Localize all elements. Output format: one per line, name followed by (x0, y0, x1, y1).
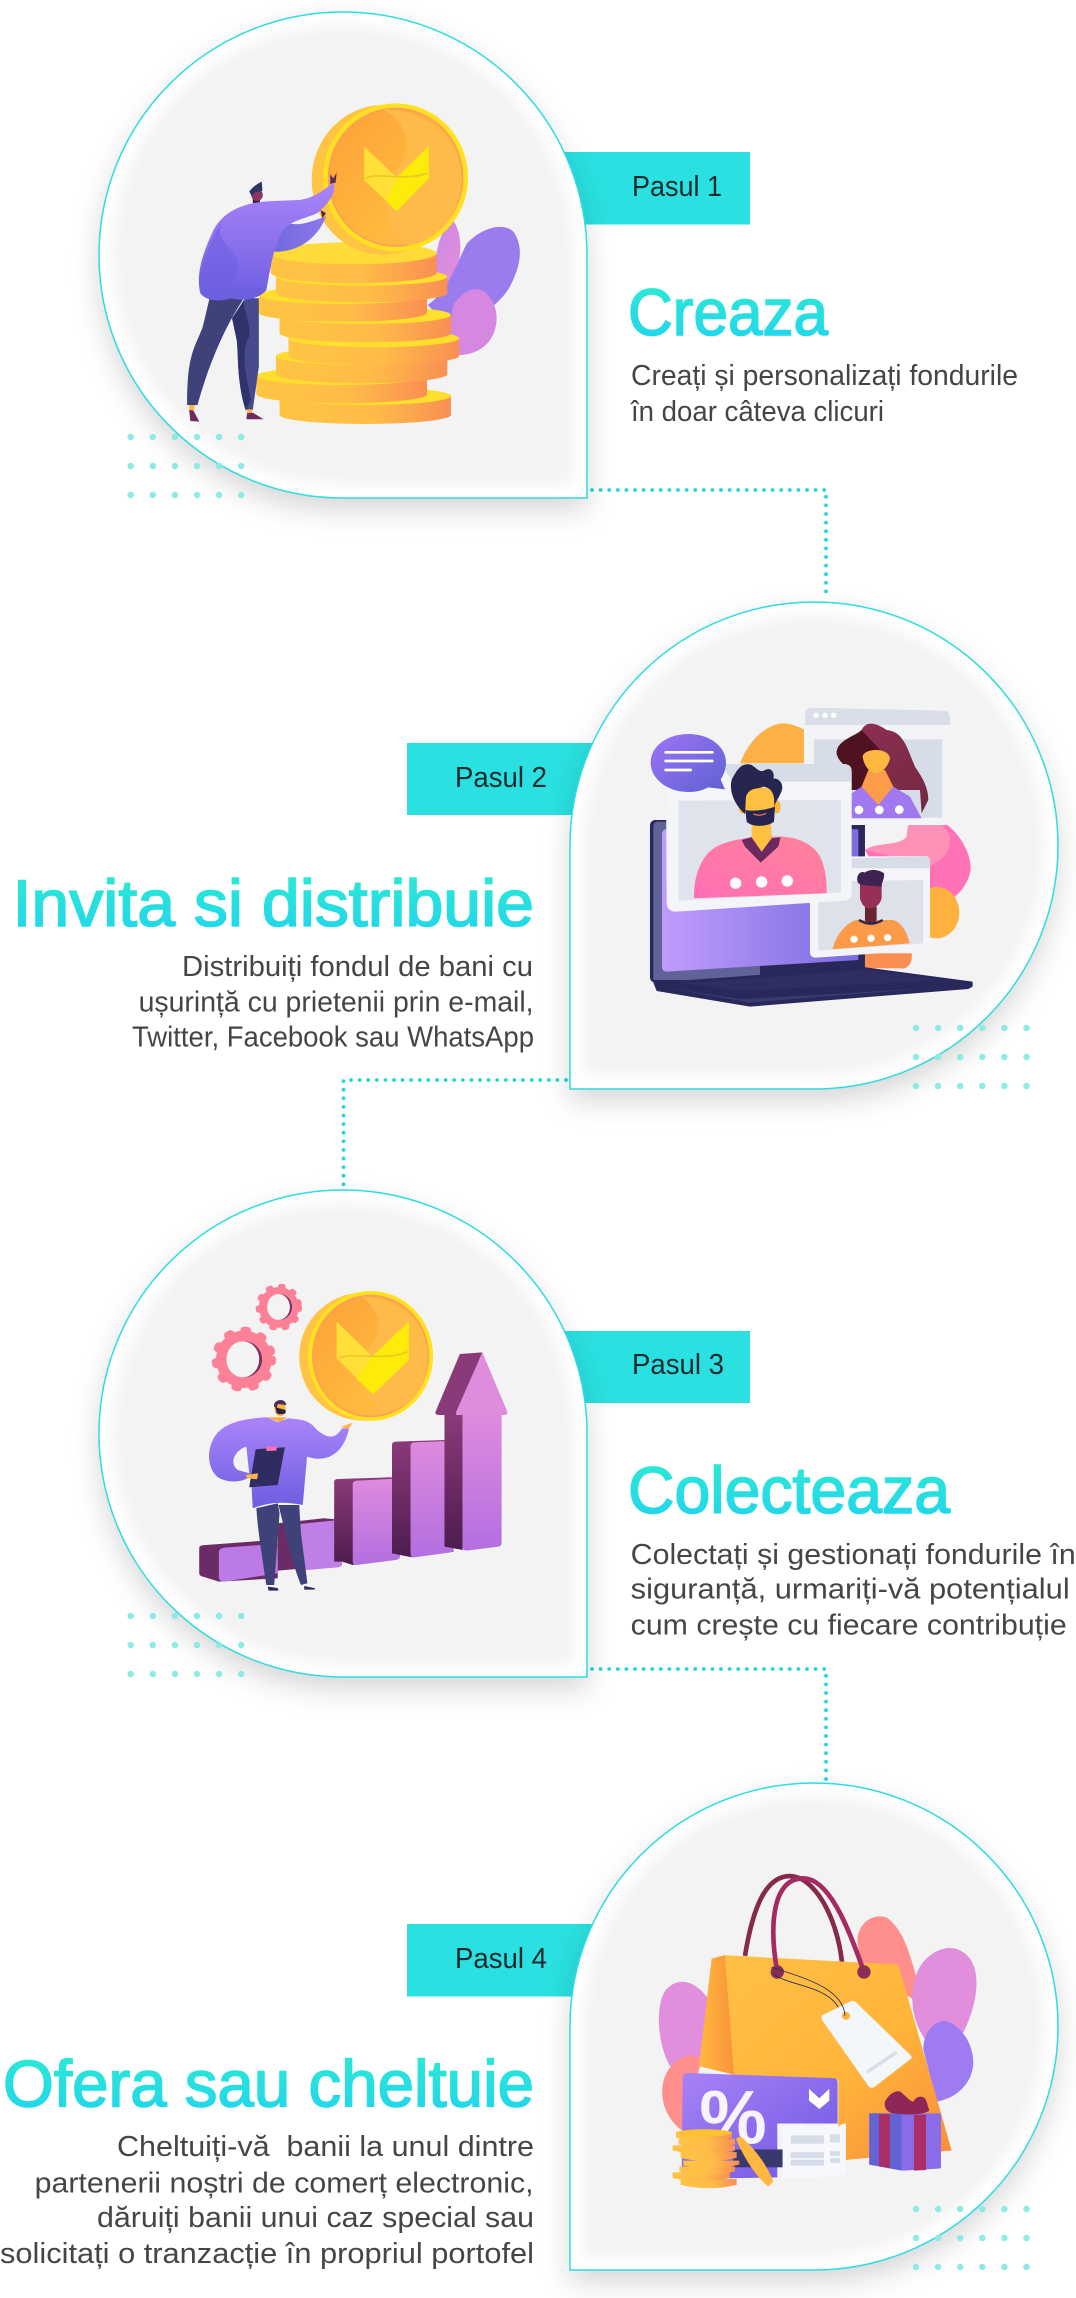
big coin (312, 103, 468, 255)
price tag (772, 1967, 912, 2088)
bag handles back (745, 1876, 842, 1962)
step 3 label tab: Pasul 3 (632, 1349, 724, 1381)
step 1 description: în doar câteva clicuri (630, 396, 884, 428)
step 3 dots (131, 1616, 242, 1674)
step 2 illustration: video call on laptop (650, 708, 973, 1007)
step 1 illustration: man pushing coin on stack (187, 103, 520, 424)
step 4 description: dăruiți banii unui caz special sau (97, 2202, 534, 2234)
step 2 label tab: Pasul 2 (455, 762, 547, 794)
step 1 teardrop card (99, 12, 587, 498)
step 4 illustration: shopping bag, card, coins, gift (659, 1876, 976, 2188)
step 3 teardrop card (99, 1190, 587, 1677)
gift box (869, 2091, 941, 2171)
step 4 description: partenerii noștri de comerț electronic, (35, 2168, 534, 2200)
step 3 description: Colectați și gestionați fondurile în (631, 1539, 1076, 1571)
bag handle front (771, 1878, 871, 1979)
step 2 heading: Invita si distribuie (12, 866, 534, 940)
step 1 description (630, 360, 1018, 428)
shopping bag (699, 1955, 952, 2161)
step 1 label tab: Pasul 1 (632, 171, 722, 203)
window: woman (804, 708, 950, 825)
small coin stack (673, 2129, 773, 2188)
step 4 label tab (407, 1924, 617, 1996)
step 3 description: cum crește cu fiecare contribuție (631, 1610, 1067, 1642)
background blobs (740, 723, 971, 938)
man with clipboard (209, 1400, 353, 1591)
step 2 description: ușurință cu prietenii prin e-mail, (139, 987, 534, 1019)
discount card (682, 2073, 838, 2179)
step 3 illustration: growth chart with coin (199, 1286, 507, 1591)
laptop (650, 820, 973, 1007)
speech bubble (651, 734, 726, 792)
step 4 dots (916, 2209, 1027, 2267)
connector: step 1 to step 2 (592, 490, 826, 599)
step 3 label tab (540, 1331, 750, 1403)
step 1 label tab (540, 152, 750, 224)
step 4 description (0, 2131, 534, 2270)
window: small man (810, 856, 930, 958)
discount card: % (699, 2075, 767, 2160)
step 4 description: Cheltuiți-vă banii la unul dintre (117, 2131, 534, 2163)
window: man with beard (666, 764, 852, 912)
step 2 description: Twitter, Facebook sau WhatsApp (132, 1022, 534, 1054)
connector: step 3 to step 4 (592, 1669, 826, 1783)
step 1 description: Creați și personalizați fondurile (631, 360, 1018, 392)
step 4 heading: Ofera sau cheltuie (3, 2047, 534, 2121)
step 4 teardrop card (570, 1783, 1058, 2270)
step 4 description: solicitați o tranzacție în propriul portofel (0, 2238, 534, 2270)
leaves (659, 1916, 976, 2130)
step 2 description (132, 951, 534, 1054)
step 2 description: Distribuiți fondul de bani cu (182, 951, 533, 983)
gears (216, 1286, 299, 1388)
step 1 heading: Creaza (628, 275, 828, 349)
step 3 description: siguranță, urmariți-vă potențialul (631, 1574, 1070, 1606)
step 2 label tab (407, 743, 617, 815)
bar chart with arrow (199, 1352, 507, 1582)
step 2 teardrop card (570, 602, 1058, 1089)
step 1 dots (131, 437, 242, 495)
receipt (783, 2124, 846, 2179)
coin stack (256, 242, 459, 424)
coin (299, 1291, 433, 1421)
step 4 label tab: Pasul 4 (455, 1943, 547, 1975)
connector: step 2 to step 3 (344, 1080, 566, 1188)
step 3 heading: Colecteaza (628, 1453, 950, 1527)
man (187, 173, 337, 422)
step 3 description (631, 1539, 1076, 1642)
leaves (428, 220, 520, 355)
step 2 dots (916, 1028, 1027, 1086)
